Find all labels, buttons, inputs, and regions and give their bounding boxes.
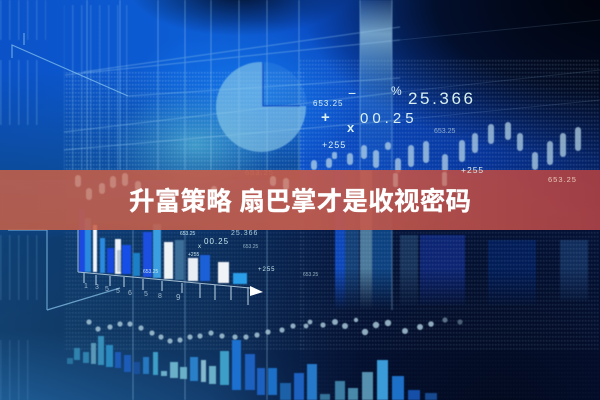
title banner [0, 165, 600, 230]
axis numbers: 6 [128, 290, 132, 297]
numeric labels upper right: 653.25 [434, 128, 456, 135]
numeric labels upper right: 25.366 [408, 89, 476, 108]
numeric labels upper right: 653.25 [245, 168, 274, 177]
axis numbers: 1 [84, 283, 88, 290]
axis numbers: 5 [116, 288, 120, 295]
chart axes [78, 230, 250, 305]
axis numbers: 5 [144, 291, 148, 298]
chart overlay labels: 653.25 [303, 272, 319, 278]
banner small label: 653.25 [548, 175, 577, 184]
axis numbers: 5 [105, 286, 109, 293]
chart overlay labels: +255 [258, 267, 276, 273]
chart overlay labels: 653.25 [243, 244, 259, 250]
grid lines [64, 0, 400, 400]
chart overlay labels: +255 [188, 252, 199, 258]
axis numbers [84, 283, 181, 302]
chart overlay labels [143, 230, 319, 278]
chart overlay labels: 00.25 [204, 237, 229, 246]
arrowhead white [250, 286, 263, 296]
faint right grid [400, 20, 600, 120]
candlesticks upper right [311, 122, 581, 173]
numeric labels upper right: 00.25 [360, 110, 418, 127]
axis numbers: 8 [158, 293, 162, 300]
axis numbers: 3 [95, 284, 99, 291]
numeric labels upper right: + [321, 109, 330, 126]
lower bar chart [67, 336, 437, 400]
chart overlay labels: 653.25 [180, 231, 196, 237]
chart overlay labels: x [198, 244, 201, 250]
lower columns [335, 170, 588, 310]
chart overlay labels: 25.366 [231, 230, 258, 237]
column beam [360, 0, 392, 170]
banner faded candles [75, 172, 447, 200]
title: 升富策略 扇巴掌才是收视密码 [129, 187, 471, 216]
numeric labels upper right: x [347, 120, 355, 135]
lower dots series [86, 317, 463, 344]
perspective bar chart [79, 209, 247, 284]
chart overlay labels: 653.25 [143, 269, 159, 275]
numeric labels upper right: % [391, 84, 402, 98]
numeric labels upper right: +255 [322, 140, 346, 150]
axis numbers: 9 [176, 293, 181, 302]
broken line left [8, 33, 128, 310]
pie chart [216, 62, 307, 152]
numeric labels upper right: − [348, 85, 356, 101]
numeric labels upper right [245, 84, 476, 177]
numeric labels upper right: 653.25 [313, 99, 343, 108]
plus label straddling banner: +255 [461, 165, 484, 175]
